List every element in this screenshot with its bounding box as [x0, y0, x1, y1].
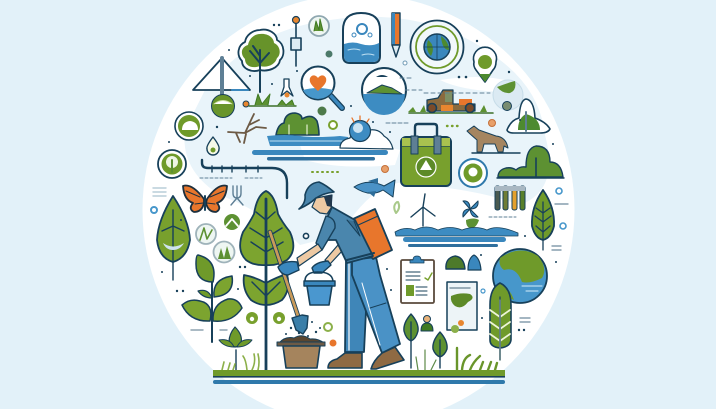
icon: leaf tree right [532, 190, 554, 250]
front leg [352, 257, 400, 353]
icon: map card [447, 282, 477, 333]
torso [322, 207, 373, 263]
icon: probe [291, 16, 301, 66]
icon: grass badge [309, 16, 329, 36]
icon: bush and bell [446, 255, 481, 270]
decorative dots and marks [161, 24, 557, 331]
icon: big tree [240, 191, 293, 370]
icon: bush by water [276, 113, 319, 135]
icon: recycling bag [401, 124, 451, 186]
icon: garden fork [231, 186, 243, 205]
icon: grass tufts [416, 348, 497, 370]
icon: small trees and person [404, 314, 447, 368]
icon: soil pot [277, 321, 325, 368]
icon: pipeline [200, 160, 287, 198]
back leg [345, 260, 367, 352]
icon: globe target [410, 20, 464, 74]
icon: fish [354, 178, 395, 197]
icon: notes [153, 188, 166, 196]
icon: water drop [207, 137, 219, 155]
icon: cloud and wind turbine [411, 191, 457, 226]
icon: sun and cloud [340, 116, 393, 149]
illustration: worker with shovel and bucket [270, 182, 404, 369]
icon: feather leaf [490, 283, 511, 360]
icon: branch [228, 114, 266, 143]
gloves [278, 262, 299, 275]
icon: pale world globe [493, 80, 523, 110]
icon: butterfly [183, 186, 227, 212]
icon: leaf tree left [157, 196, 190, 280]
head [312, 195, 332, 214]
icon: water waves right [395, 227, 518, 247]
icon: earth globe [493, 249, 547, 303]
bucket [305, 272, 333, 281]
icon: river bands [252, 135, 388, 160]
icon: test tubes [489, 186, 525, 217]
icon: tree top left [238, 30, 283, 92]
icon: tree badge left [158, 150, 186, 178]
hat [299, 182, 334, 209]
icon: tent and pole [193, 58, 250, 118]
arm [316, 216, 335, 250]
icon: water jar [343, 13, 380, 63]
icon: tractor [408, 90, 493, 113]
far arm [325, 245, 343, 264]
backpack [353, 209, 392, 259]
icon: small badges [151, 207, 336, 346]
icon: tree in tent outline [507, 99, 550, 133]
icon: pencil [392, 13, 400, 57]
boots [328, 353, 362, 368]
icon: plant with leaves [182, 255, 242, 342]
icon: leaf sprig [463, 201, 479, 228]
icon: bushes [497, 146, 564, 178]
icon: tree badge [459, 159, 487, 187]
icon: ground strip [213, 354, 505, 384]
icon: animal badge [175, 112, 203, 140]
icon: magnifier with heart [302, 66, 342, 108]
icon: mountain lake circle [362, 68, 406, 115]
shovel [270, 232, 298, 316]
icon: seedling [219, 327, 252, 370]
icon: map pin [474, 47, 496, 82]
icon: clipboard [401, 256, 434, 303]
icon: dog [467, 126, 520, 153]
icon: tree with reeds [243, 94, 296, 107]
small accents [312, 50, 568, 322]
icon: flask flame [281, 79, 293, 98]
